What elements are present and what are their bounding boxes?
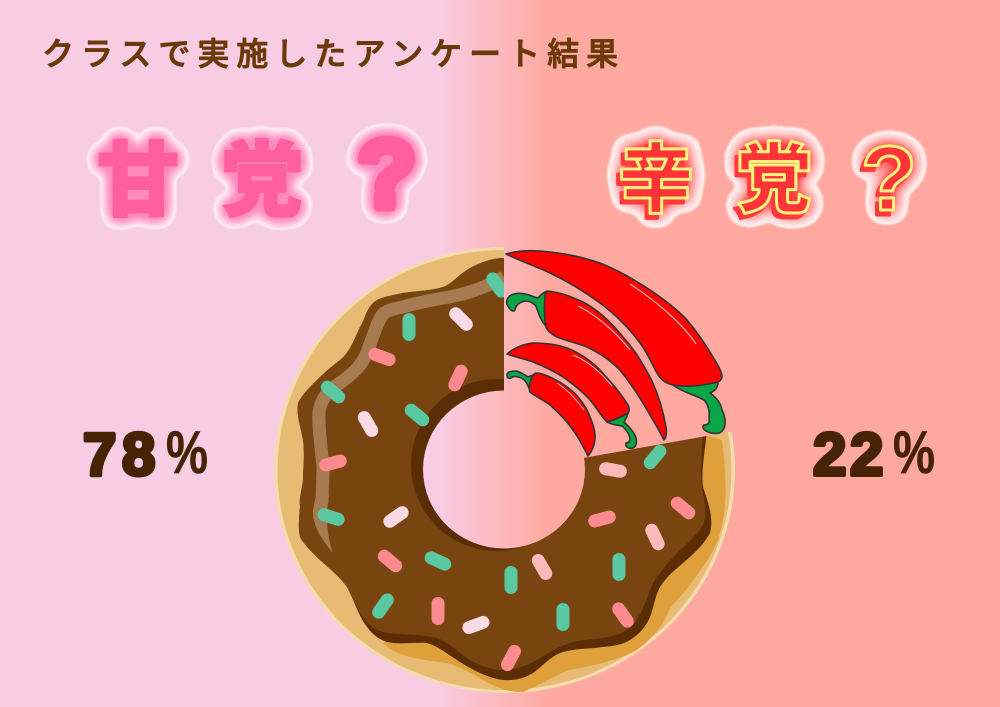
icing main: [298, 258, 705, 670]
sprinkles: [316, 270, 698, 673]
donut base: [274, 247, 735, 693]
chili peppers segment: 22%: [506, 251, 725, 456]
chili pepper 3: [507, 343, 636, 448]
chili pepper 2: [507, 291, 666, 440]
percentage: sweet 78%: %: [166, 419, 208, 486]
percentage: spicy 22%: %: [893, 419, 935, 486]
percentage: spicy 22%: 2: [813, 421, 846, 488]
percentage: spicy 22%: 2: [850, 421, 883, 488]
heading: sweet tooth: 党: [221, 136, 303, 227]
heading: spicy lover: 辛: [618, 138, 694, 223]
percentage: sweet 78%: 7: [83, 421, 116, 488]
chili pepper 1: [506, 251, 725, 434]
heading: sweet tooth: ?: [358, 121, 416, 228]
chili pepper 4: [507, 371, 595, 456]
icing dark edge: [298, 258, 711, 680]
heading: spicy lover: 党: [736, 138, 812, 223]
icing highlight: [313, 277, 504, 553]
title: クラスで実施したアンケート結果: [42, 36, 625, 72]
donut underside shadow: [383, 430, 726, 692]
heading: spicy lover: ?: [861, 128, 917, 230]
heading: sweet tooth: 甘: [97, 136, 179, 227]
dark ring around hole: [411, 379, 532, 551]
donut chart segment: 78%: [274, 247, 735, 693]
percentage: sweet 78%: 8: [122, 421, 155, 488]
